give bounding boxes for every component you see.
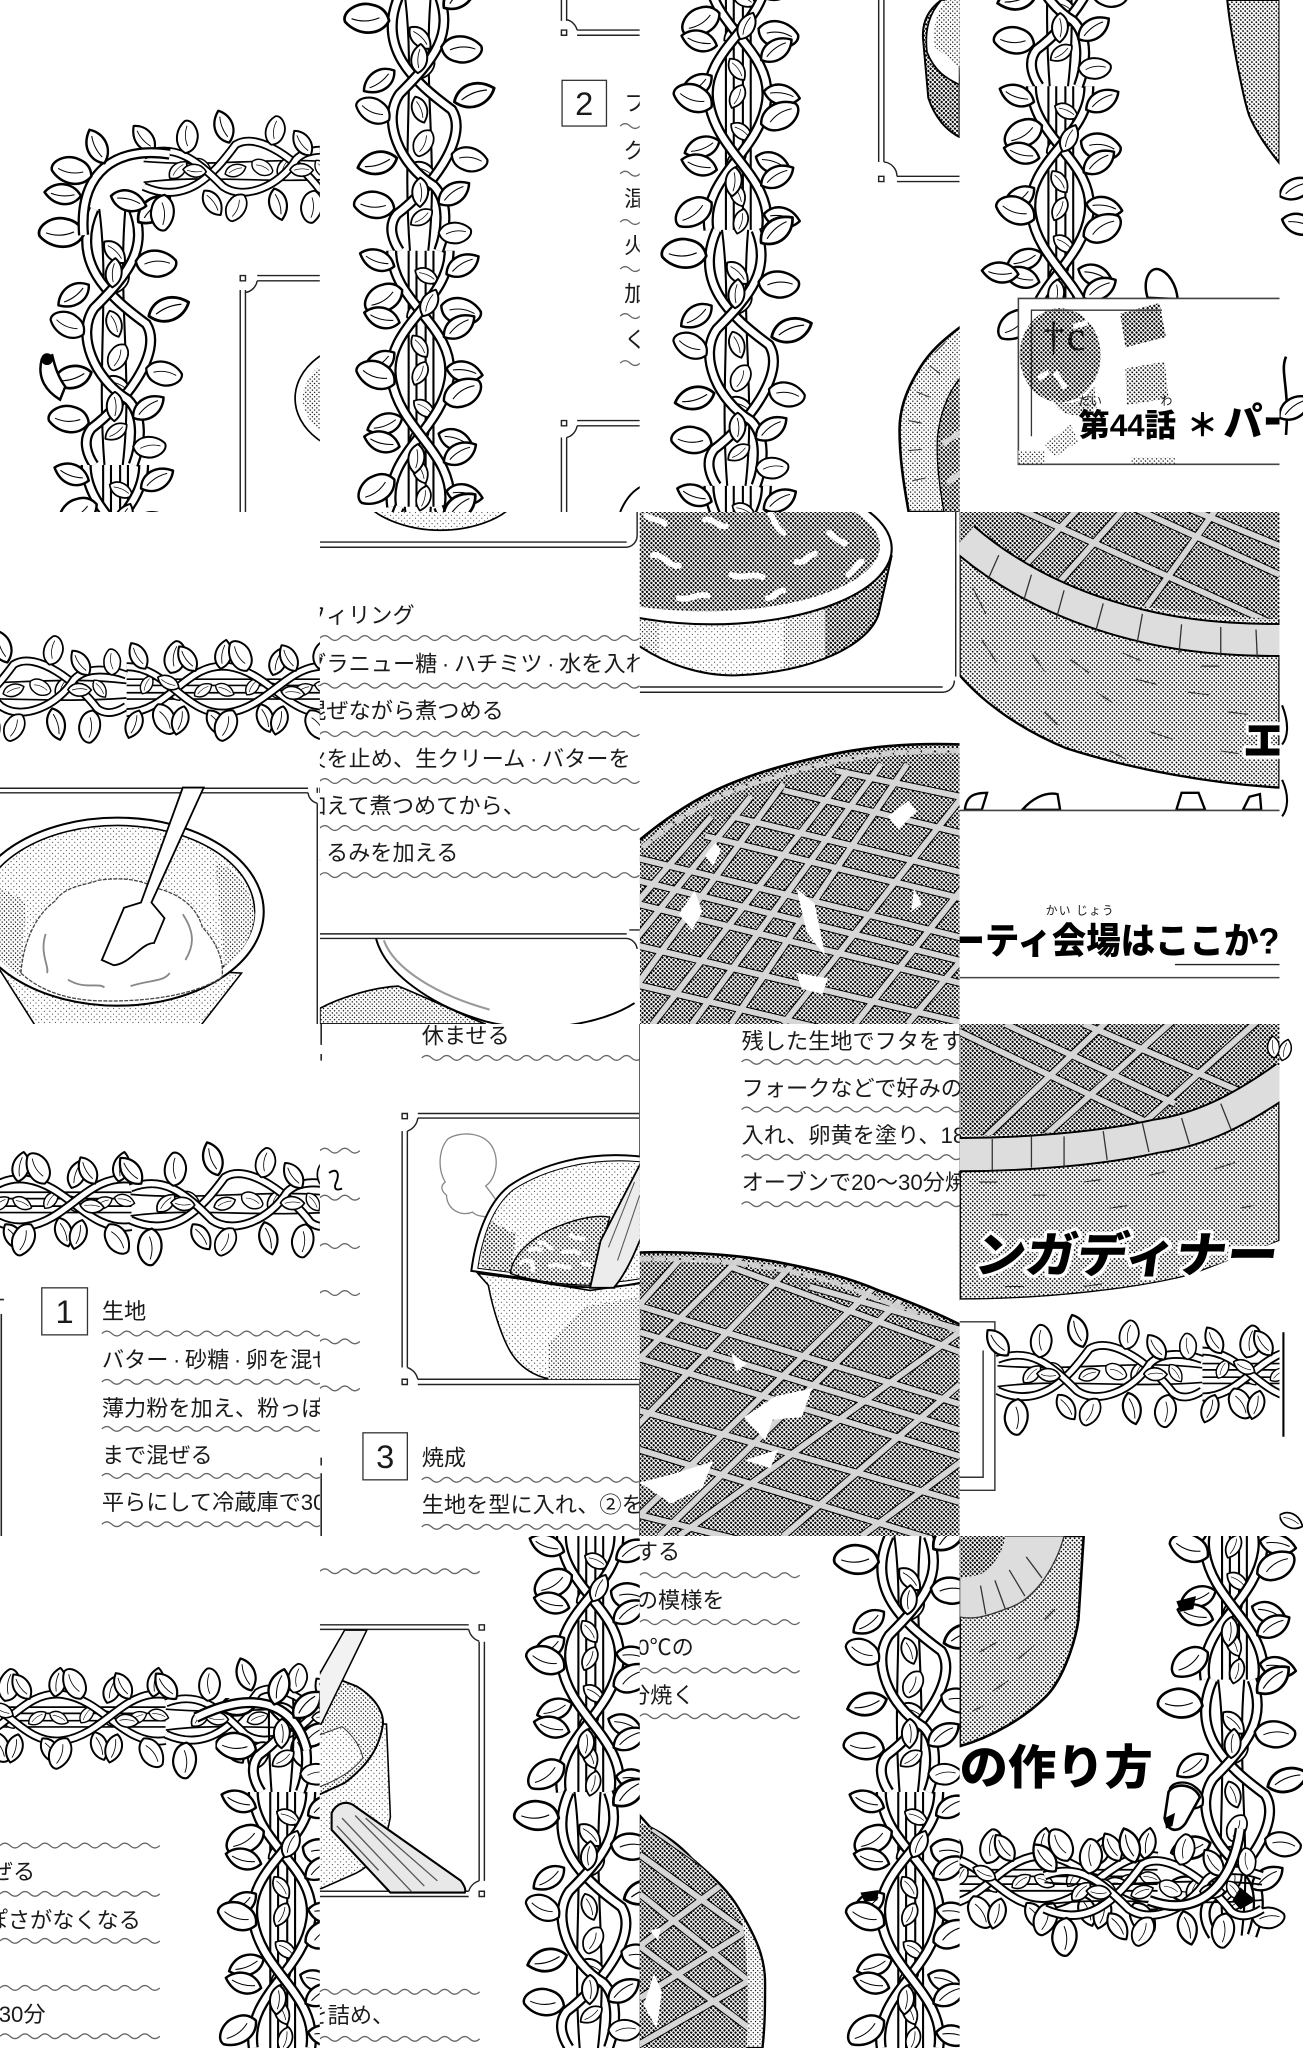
frame top: [0, 788, 320, 1024]
pie side: [960, 1536, 1084, 1746]
frame bottom: [320, 512, 637, 547]
step 3 text end: 0℃の: [637, 1635, 694, 1660]
step 3 continued: フォークなどで好みの模様を: [742, 1076, 1030, 1101]
vine: vertical: [512, 1528, 667, 2048]
panel: tile vine with step 2 heading: [343, 0, 640, 512]
step 3 continued: 残した生地でフタをする: [742, 1029, 986, 1054]
title box: [1018, 298, 1302, 464]
wooden spatula: [590, 1162, 646, 1288]
step number 2: [562, 80, 606, 126]
black tip: [1232, 1887, 1256, 1910]
panel: tile vine with tart and pie edge: [660, 0, 960, 512]
filling steps text: グラニュー糖 · ハチミツ · 水を入れ: [304, 651, 648, 676]
step 2 text fragments: くるみ: [624, 327, 690, 352]
text 休ませる: [422, 1024, 741, 1060]
frame corner: [240, 276, 320, 512]
frame: [402, 1024, 640, 1536]
step 1 text: 平らにして冷蔵庫で30分: [102, 1490, 348, 1515]
step 1 text: まで混ぜる: [102, 1443, 213, 1468]
speech bubble: [440, 1134, 507, 1217]
step 3 text: 焼成: [422, 1445, 466, 1470]
step number 3: 3: [376, 1438, 394, 1475]
step 1 text: [102, 1299, 457, 1527]
step number 1: [42, 1288, 87, 1335]
lattice pie: [614, 731, 973, 1032]
vine: vertical: [660, 0, 813, 512]
step 3 continued: [742, 1029, 1061, 1207]
panel: bowl right, vine: [306, 1528, 667, 2048]
spatula handle: [313, 1630, 367, 1724]
pie edge: [1227, 0, 1279, 163]
frame: [320, 1625, 484, 1896]
frame corners: [561, 0, 640, 512]
title underline: [1175, 964, 1279, 966]
step 3 text: 生地を型に入れ、②を詰め、: [422, 1492, 710, 1517]
pie part: [640, 1816, 783, 2048]
black leaf tip: [1176, 1596, 1196, 1612]
tart edge: [923, 0, 960, 137]
filling steps text: 火を止め、生クリーム · バターを: [304, 747, 631, 772]
ruby: わ: [1161, 395, 1172, 408]
crust: [960, 1078, 1286, 1155]
white clearing below title: [960, 1241, 1279, 1322]
box corner: [960, 1322, 995, 1490]
inner frame line: [1031, 310, 1162, 436]
step number 3: [363, 1433, 407, 1480]
panel: right strip fragments: [1274, 173, 1303, 1533]
filling steps text: 混ぜながら煮つめる: [304, 698, 504, 723]
filling steps text: 加えて煮つめてから、: [304, 794, 525, 819]
panel: pie bottom and title text: [950, 503, 1286, 978]
pouring bowl: [471, 1155, 646, 1379]
panel: pouring bowl and step 3: [320, 1024, 741, 1536]
vine: corner border: [38, 110, 320, 512]
panel: tile top-left vine corner and frame: [38, 110, 320, 512]
pie edge: [898, 326, 960, 512]
panel: pie crust, title and vine: [960, 1019, 1303, 1490]
text 休ませる: 休ませる: [422, 1024, 510, 1049]
step 3 continued: 入れ、卵黄を塗り、180℃の: [742, 1123, 1022, 1148]
leaves at box top: [965, 793, 1261, 810]
vine: horizontal: [0, 630, 320, 744]
leaves in strip: [1274, 173, 1303, 1533]
step 3 text end: [628, 1540, 800, 1719]
step 2 text fragments: [620, 95, 640, 366]
title box top: [960, 810, 1279, 978]
step 2 text fragments: フィリング: [624, 91, 735, 116]
ruby: かい じょう: [1046, 904, 1114, 917]
vine: horizontal: [981, 1312, 1303, 1436]
pie side: [960, 503, 1279, 788]
frame corner: [640, 512, 961, 692]
dough: [21, 879, 222, 1001]
title text end: の作り方: [960, 1741, 1153, 1794]
filling steps text: フィリング: [304, 603, 415, 628]
step 1 text: 生地: [102, 1299, 146, 1324]
panel: pie edge and vine: [628, 1516, 987, 2048]
step 1 text: バター · 砂糖 · 卵を混ぜる: [102, 1348, 357, 1373]
bowl edge: [294, 355, 320, 442]
hatch marks: [979, 1162, 1253, 1287]
step 2 text fragments: 火を止め: [624, 233, 713, 258]
frame edge: [0, 1300, 4, 1536]
episode title continued: ーティ会場はここか?: [950, 920, 1279, 961]
bowl right part: [313, 1630, 465, 1893]
icon: black-tipped leaf: [40, 353, 65, 400]
panel: tart and lattice pie: [640, 512, 960, 1024]
episode title: パー: [1223, 402, 1302, 445]
bowl edge: [620, 486, 642, 512]
panel: horizontal vine and step 1: [0, 1140, 457, 1536]
step number 2: 2: [575, 85, 593, 122]
step 3 text end: の模様を: [636, 1588, 725, 1613]
spatula: [102, 788, 204, 965]
episode title: 第44話: [1078, 408, 1176, 443]
vine: vertical: [832, 1516, 987, 2048]
panel: tile vine with title box start: [980, 0, 1302, 464]
step 1 leftovers: [320, 1024, 360, 1536]
wave line: [320, 1569, 480, 1574]
step 3 text end: する: [636, 1540, 680, 1565]
step number 1: 1: [56, 1293, 74, 1330]
panel: vine corner and step 1 end: [0, 1516, 371, 2048]
ruby: [1079, 395, 1172, 406]
episode title: ＊: [1187, 408, 1218, 443]
vine: corner border: [934, 1416, 1303, 1957]
text 詰め: を詰め、: [306, 2003, 394, 2028]
vine: corner border: [0, 1516, 371, 2048]
mixing bowl: [0, 788, 264, 1032]
dough: [510, 1216, 610, 1285]
step 1 text continued: [0, 1843, 160, 2039]
logo mark: †c: [1043, 314, 1088, 360]
step 3 text: [422, 1445, 741, 1529]
pie crust and lid: [320, 938, 635, 1027]
panel: horizontal vine and mixing bowl: [0, 628, 336, 1032]
step 1 text: 薄力粉を加え、粉っぽさがなくなる: [102, 1396, 457, 1421]
leaf top right: [1268, 1036, 1279, 1058]
tart: [640, 512, 893, 676]
step 2 text fragments: グラニュー糖: [624, 138, 757, 163]
lattice pie top: [614, 1241, 960, 1548]
step 1 text continued: 30分: [0, 2002, 46, 2027]
rolling pin handle: [332, 1803, 465, 1893]
halftone skull stamp: [1018, 303, 1175, 464]
ruby: だい: [1078, 395, 1102, 408]
filling steps text: くるみを加える: [304, 841, 458, 866]
frame corner: [879, 0, 960, 182]
title fragment エ: エ: [1243, 718, 1286, 766]
panel: step 3 text and pie: [614, 1029, 1061, 1548]
leaf above box: [1146, 269, 1178, 299]
hatch marks: [973, 588, 1248, 759]
vine: horizontal: [0, 1140, 340, 1267]
frame top of next image: [320, 930, 642, 949]
icon: bud: [1165, 1786, 1200, 1830]
bowl bottom arc: [374, 512, 507, 532]
step 3 continued: オーブンで20〜30分焼く: [742, 1170, 989, 1195]
step 2 text fragments: 混ぜながら: [624, 186, 735, 211]
step 3 text end: 分焼く: [628, 1683, 695, 1708]
text 詰め: [306, 1989, 480, 2041]
black leaf tip: [860, 1890, 879, 1902]
step 2 text fragments: 加えて: [624, 282, 690, 307]
title text: ンガディナー: [971, 1228, 1282, 1283]
vine: vertical: [980, 0, 1137, 348]
filling steps text: [304, 603, 648, 877]
crust: [964, 538, 1279, 640]
vine: vertical: [343, 0, 496, 512]
pie side: [960, 1019, 1286, 1300]
panel: filling instructions: [304, 503, 648, 1027]
panel: pie end, title end, vine corner: [934, 1416, 1303, 1957]
